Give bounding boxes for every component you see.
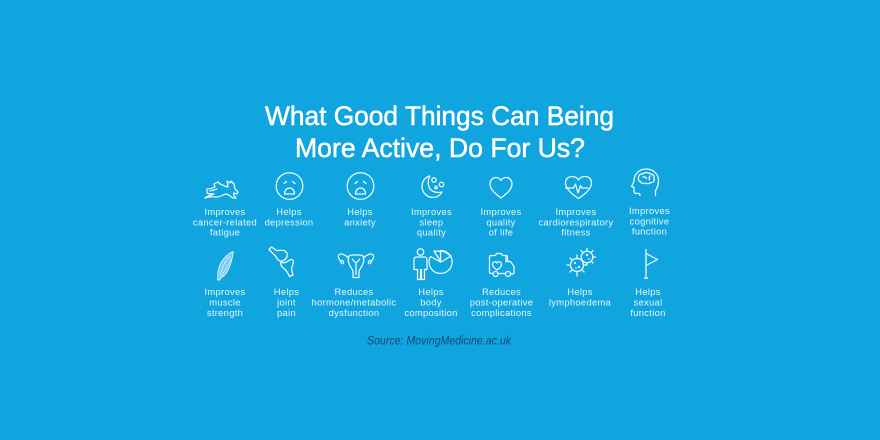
label: improves cardiorespiratory fitness: fitness <box>561 226 591 238</box>
label: helps joint pain <box>274 286 299 318</box>
icon: running rabbit <box>205 181 238 198</box>
title: More Active, Do For Us? <box>295 133 585 163</box>
label: improves cardiorespiratory fitness <box>539 206 613 238</box>
label: improves cancer-related fatigue: cancer-related <box>193 216 257 228</box>
label: reduces hormone/metabolic dysfunction <box>312 286 396 318</box>
label: helps sexual function: Helps <box>635 286 661 297</box>
icon: uterus <box>338 254 374 278</box>
label: improves cardiorespiratory fitness: cardiorespiratory <box>539 216 613 228</box>
icon: moon and stars <box>422 176 444 198</box>
label: improves muscle strength: strength <box>207 307 243 318</box>
label: reduces post-operative complications <box>470 286 533 318</box>
label: helps depression: Helps <box>276 206 302 217</box>
icon: heart with pulse <box>566 176 592 198</box>
label: helps body composition <box>404 286 458 318</box>
label: improves sleep quality: sleep <box>420 216 443 228</box>
label: helps anxiety <box>344 206 376 228</box>
label: improves cancer-related fatigue: fatigue <box>210 226 240 238</box>
label: reduces hormone/metabolic dysfunction: Reduces <box>334 286 374 297</box>
label: improves quality of life <box>481 206 521 238</box>
label: helps joint pain: pain <box>277 307 296 318</box>
label: improves cognitive function <box>629 205 670 236</box>
label: reduces post-operative complications: complications <box>471 307 532 318</box>
title <box>265 101 614 163</box>
label: improves quality of life: of life <box>489 226 513 238</box>
icon: virus cells <box>567 248 596 276</box>
label: improves muscle strength: muscle <box>209 296 241 308</box>
label: helps joint pain: Helps <box>274 286 299 297</box>
label: helps lymphoedema: lymphoedema <box>549 296 612 308</box>
label: improves cancer-related fatigue: Improves <box>205 206 245 217</box>
label: improves quality of life: quality <box>486 216 516 228</box>
icon: joint bones <box>269 247 293 276</box>
icon: muscle <box>218 252 233 280</box>
label: helps body composition: composition <box>404 307 458 318</box>
label: helps sexual function: sexual <box>634 296 662 308</box>
icon: heart <box>490 178 512 198</box>
label: helps depression <box>265 206 313 228</box>
label: improves cognitive function: Improves <box>629 205 670 216</box>
label: helps body composition: body <box>420 296 442 308</box>
label: reduces post-operative complications: post-operative <box>470 296 533 308</box>
label: improves sleep quality: quality <box>417 226 446 238</box>
label: improves muscle strength: Improves <box>205 286 245 297</box>
label: improves cognitive function: cognitive <box>630 216 669 226</box>
icon: head with brain <box>632 169 658 196</box>
label: improves muscle strength <box>205 286 245 318</box>
label: helps sexual function <box>630 286 666 318</box>
label: helps body composition: Helps <box>418 286 444 297</box>
label: helps joint pain: joint <box>276 296 296 308</box>
icon: ambulance with heart <box>490 254 514 276</box>
source note: Source: MovingMedicine.ac.uk <box>367 336 512 348</box>
label: helps anxiety: anxiety <box>344 216 376 228</box>
label: improves sleep quality <box>411 206 452 238</box>
label: improves quality of life: Improves <box>481 206 521 217</box>
label: reduces hormone/metabolic dysfunction: dysfunction <box>329 307 379 318</box>
title: What Good Things Can Being <box>265 101 614 131</box>
label: reduces post-operative complications: Reduces <box>482 286 521 297</box>
icon: person with pie chart <box>414 249 452 280</box>
icon: sad face anxiety <box>347 173 374 199</box>
icon: sad face depression <box>276 173 303 199</box>
label: helps anxiety: Helps <box>347 206 373 217</box>
label: helps lymphoedema: Helps <box>567 286 593 297</box>
label: improves cancer-related fatigue <box>193 206 257 238</box>
icon: flag <box>644 250 658 278</box>
label: improves cognitive function: function <box>632 226 667 236</box>
label: helps depression: depression <box>265 216 313 228</box>
label: improves sleep quality: Improves <box>411 206 452 217</box>
label: helps sexual function: function <box>630 307 666 318</box>
label: improves cardiorespiratory fitness: Improves <box>556 206 596 217</box>
label: reduces hormone/metabolic dysfunction: hormone/metabolic <box>312 296 396 308</box>
label: helps lymphoedema <box>549 286 612 308</box>
